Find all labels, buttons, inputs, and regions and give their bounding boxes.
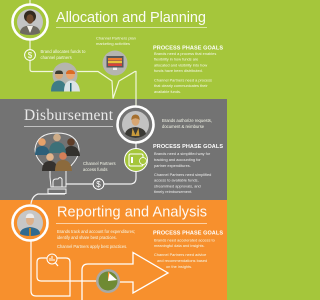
connector line: reporting — [31, 240, 97, 296]
text: goals 2: Brands need a simplified way for — [154, 151, 211, 156]
text: goals 2: tracking and accounting for — [154, 157, 201, 162]
connector line: disbursement — [31, 143, 136, 204]
heading: process phase goals 2: PROCESS PHASE GOALS — [153, 144, 223, 150]
text: goals 1: funds have been distributed. — [154, 68, 203, 73]
text: goals 1: Channel Partners need a process — [154, 78, 212, 82]
icon: green safe — [124, 148, 148, 172]
text: channel partners plan: marketing activities — [96, 41, 130, 46]
text: brands authorize: document & reimburse — [162, 124, 205, 129]
panel: reporting and analysis — [0, 200, 227, 300]
heading: process phase goals 3: PROCESS PHASE GOALS — [153, 230, 223, 236]
text: brand allocates funds: Brand allocates funds to — [40, 49, 86, 54]
icon: light bulb with team — [35, 133, 80, 194]
text: goals 3: Brands need accelerated access to — [154, 238, 215, 242]
panel: allocation and planning — [0, 0, 227, 99]
text: goals 1: allocated and visibility into how — [154, 62, 207, 67]
text: brands track: Brands track and account for expenditures; — [57, 229, 135, 234]
title: reporting and analysis: Reporting and Analysis — [57, 205, 207, 221]
icon: two partners — [51, 62, 80, 92]
connector line: allocation — [30, 0, 136, 106]
text: channel partners access funds: Channel Partners — [83, 161, 116, 166]
text: goals 3: on the insights. — [166, 264, 192, 269]
text: brands track: identify and share best practices. — [57, 235, 117, 240]
text: goals 3: meaningful data and insights. — [154, 243, 205, 248]
text: brands track: Channel Partners apply best practices. — [57, 244, 127, 249]
text: goals 2: Channel Partners need simplified — [154, 172, 211, 177]
icon: older man portrait — [12, 206, 48, 240]
text: channel partners access funds: access funds — [83, 167, 107, 172]
icon: dollar coin — [93, 179, 104, 189]
title underline — [56, 222, 207, 225]
icon: dollar coin — [25, 50, 35, 60]
icon: pie chart — [96, 269, 120, 293]
text: brand allocates funds: channel partners — [40, 55, 72, 60]
icon: man portrait — [118, 106, 154, 142]
title underline — [56, 26, 207, 29]
text: goals 3: Channel Partners need advice — [154, 252, 206, 257]
title: disbursement: Disbursement — [24, 107, 114, 124]
text: goals 2: streamlined approvals, and — [154, 183, 201, 188]
text: goals 3: and recommendations based — [157, 258, 207, 263]
panel: disbursement — [0, 99, 227, 200]
text: channel partners plan: Channel Partners plan — [96, 36, 136, 40]
text: goals 1: that clearly communicates their — [154, 83, 208, 88]
text: goals 2: access to available funds, — [154, 178, 199, 183]
icon: dollar coin: $ — [96, 180, 101, 189]
title underline — [24, 125, 113, 128]
text: goals 1: available funds. — [154, 89, 181, 94]
icon: dollar coin: $ — [28, 51, 33, 60]
text: goals 2: partner expenditures. — [154, 163, 191, 168]
text: brands authorize: Brands authorize requests, — [162, 118, 212, 123]
heading: process phase goals 1: PROCESS PHASE GOALS — [153, 46, 223, 52]
text: goals 1: flexibility in how funds are — [154, 57, 198, 62]
icon: magnifier chart — [47, 254, 58, 266]
icon: woman portrait — [12, 4, 48, 40]
arrow: large outlined arrow — [82, 252, 168, 300]
icon: monitor — [102, 50, 128, 76]
text: goals 2: timely reimbursement. — [154, 189, 192, 194]
title: allocation and planning: Allocation and Planning — [56, 10, 206, 26]
text: goals 1: Brands need a process that enables — [154, 51, 216, 56]
